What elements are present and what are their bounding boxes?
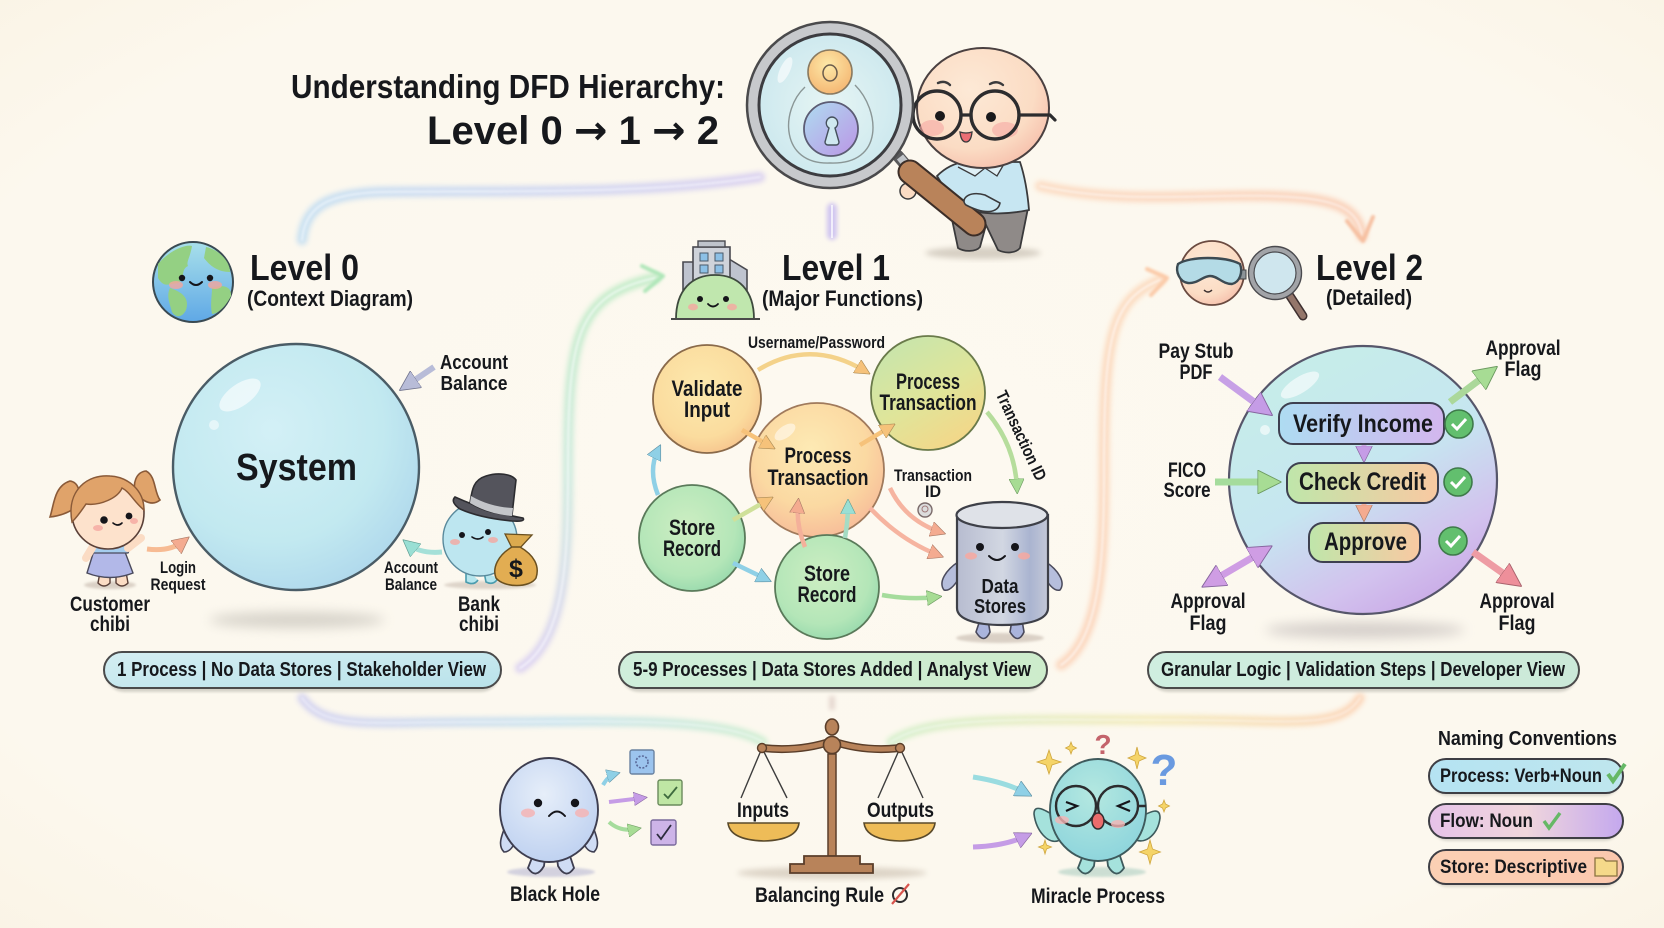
label: bank chibi: chibi (459, 613, 499, 636)
title: Level 0 → 1 → 2 (427, 108, 719, 154)
flow arrows: level 1 (653, 354, 1017, 598)
process: transaction top right: Transaction (880, 390, 976, 415)
pitfall: miracle process: ? (1151, 746, 1177, 795)
convention: process: Process: Verb+Noun (1440, 766, 1602, 787)
flow: approval flag bottom right (1473, 552, 1554, 635)
convention: store (1429, 850, 1623, 887)
flow: account balance top: Account (440, 352, 508, 374)
process: transaction centre (750, 403, 884, 537)
flow: account balance from bank: Balance (385, 576, 437, 594)
icon: globe (153, 242, 233, 322)
balancing rule scale (728, 719, 935, 907)
label: rotated transaction id: Transaction ID (992, 388, 1050, 484)
summary pill: level 0: 1 Process | No Data Stores | Stakeholder View (117, 659, 486, 681)
connector: overview to level 1 (827, 203, 837, 240)
process: validate input (653, 345, 761, 453)
label: bank chibi (458, 593, 500, 636)
process: transaction centre: Process (784, 443, 852, 468)
heading: level 1: (Major Functions) (762, 286, 923, 311)
balancing rule scale: Balancing Rule (755, 884, 884, 907)
process: store record bottom (775, 535, 879, 639)
flow: pay stub pdf: PDF (1180, 361, 1213, 384)
step: verify income: Verify Income (1293, 410, 1433, 438)
connector: overview to level 2 (1040, 186, 1373, 241)
label: transaction id: ID (925, 482, 941, 501)
label: username password: Username/Password (748, 334, 885, 352)
process: validate input: Input (684, 397, 731, 422)
step: approve (1309, 523, 1420, 562)
flow: login request (147, 541, 206, 594)
connector: overview to level 0 (302, 177, 760, 240)
heading: level 2: (Detailed) (1326, 285, 1412, 310)
heading: level 2: Level 2 (1316, 247, 1423, 288)
flow: approval flag bottom right: Approval (1480, 590, 1554, 613)
flow: fico score: FICO (1168, 459, 1206, 482)
checks (1439, 410, 1473, 555)
summary pill: level 1 (619, 652, 1047, 692)
heading: level 2 (1177, 241, 1423, 316)
label: customer chibi (70, 593, 150, 636)
flow: approval flag bottom left: Approval (1170, 590, 1246, 613)
process: transaction top right: Process (896, 369, 960, 394)
summary pill: level 0 (104, 652, 501, 692)
panel: level 2 detailed (1148, 337, 1579, 692)
flow: approval flag top right (1450, 337, 1560, 402)
flow: account balance top: Balance (440, 373, 508, 395)
flow: account balance from bank (384, 544, 442, 594)
convention: process (1429, 759, 1625, 796)
process: store record bottom: Record (798, 582, 856, 607)
process: store record bottom: Store (804, 561, 850, 586)
pitfall: miracle process: ? (1094, 729, 1112, 760)
heading: level 1 (671, 241, 923, 319)
label: customer chibi: Customer (70, 593, 150, 616)
flow: login request: Request (150, 576, 206, 594)
connector: level 2 to balancing rule (891, 698, 1360, 742)
external entity: bank chibi (443, 474, 537, 589)
label: customer chibi: chibi (90, 613, 130, 636)
process: system sphere (173, 344, 419, 628)
step: check credit: Check Credit (1299, 468, 1427, 496)
external entity: customer chibi (50, 471, 160, 589)
flow: login request: Login (160, 559, 196, 577)
connector: level 0 to balancing rule (302, 698, 763, 742)
process: store record left: Store (669, 515, 715, 540)
flow: account balance top (406, 352, 508, 395)
flow: pay stub pdf: Pay Stub (1158, 340, 1234, 363)
flow: approval flag top right: Flag (1504, 358, 1542, 381)
pitfall: black hole (500, 758, 600, 906)
connector: level 0 to level 1 (520, 266, 663, 668)
mascot: bald chibi with magnifying glass (747, 22, 1055, 259)
pitfall: miracle process: Miracle Process (1031, 885, 1165, 908)
heading: level 0 (153, 242, 413, 322)
process: transaction centre: Transaction (768, 465, 868, 490)
heading: level 0: (Context Diagram) (247, 286, 413, 311)
icon: building chibi (671, 241, 760, 319)
flow: approval flag bottom right: Flag (1498, 612, 1536, 635)
data store: cylinder chibi: Data (982, 576, 1019, 598)
label: transaction id: Transaction (894, 466, 972, 485)
small arrows between steps (1362, 444, 1366, 515)
summary pill: level 1: 5-9 Processes | Data Stores Added | Analyst View (633, 659, 1031, 681)
panel: level 1 major functions (619, 334, 1062, 692)
heading: level 1: Level 1 (782, 247, 890, 288)
step: approve: Approve (1324, 528, 1407, 556)
icon: magnifier (1248, 246, 1303, 316)
naming conventions legend: Naming Conventions (1438, 728, 1617, 750)
process: store record left: Record (663, 536, 721, 561)
label: transaction id (894, 466, 972, 517)
naming conventions legend (1429, 728, 1625, 887)
convention: flow (1429, 804, 1623, 841)
flow: approval flag bottom left (1170, 553, 1260, 635)
process: store record left (639, 485, 745, 591)
pitfall: miracle process (973, 729, 1177, 908)
flow: fico score (1164, 459, 1272, 502)
connector: level 1 to balancing rule (829, 696, 835, 710)
pitfall: black hole: Black Hole (510, 883, 600, 906)
data store: cylinder chibi (942, 502, 1062, 643)
flow: pay stub pdf (1158, 340, 1265, 410)
step: check credit (1287, 463, 1438, 503)
title: Understanding DFD Hierarchy: (291, 68, 725, 105)
process: transaction top right (871, 336, 985, 450)
process: validate input: Validate (672, 376, 742, 401)
external entity: bank chibi: $ (509, 555, 523, 583)
process: system sphere: System (236, 447, 357, 489)
flow: fico score: Score (1164, 479, 1210, 502)
process sphere: level 2 (1229, 346, 1497, 638)
flow: account balance from bank: Account (384, 559, 438, 577)
convention: flow: Flow: Noun (1440, 811, 1533, 832)
heading: level 0: Level 0 (250, 247, 359, 288)
step: verify income (1279, 403, 1444, 444)
label: bank chibi: Bank (458, 593, 500, 616)
title (291, 68, 725, 154)
flow: approval flag top right: Approval (1486, 337, 1560, 360)
panel: level 0 context diagram (50, 344, 537, 692)
flow: approval flag bottom left: Flag (1190, 612, 1226, 635)
summary pill: level 2: Granular Logic | Validation Steps | Developer View (1161, 659, 1565, 681)
data store: cylinder chibi: Stores (974, 596, 1026, 618)
convention: store: Store: Descriptive (1440, 857, 1587, 878)
balancing rule scale: Inputs (737, 799, 789, 822)
balancing rule scale: Outputs (867, 799, 934, 822)
connector: level 1 to level 2 (1061, 269, 1167, 665)
summary pill: level 2 (1148, 652, 1579, 692)
icon: goggles head (1177, 241, 1246, 305)
black hole outputs (603, 750, 682, 845)
